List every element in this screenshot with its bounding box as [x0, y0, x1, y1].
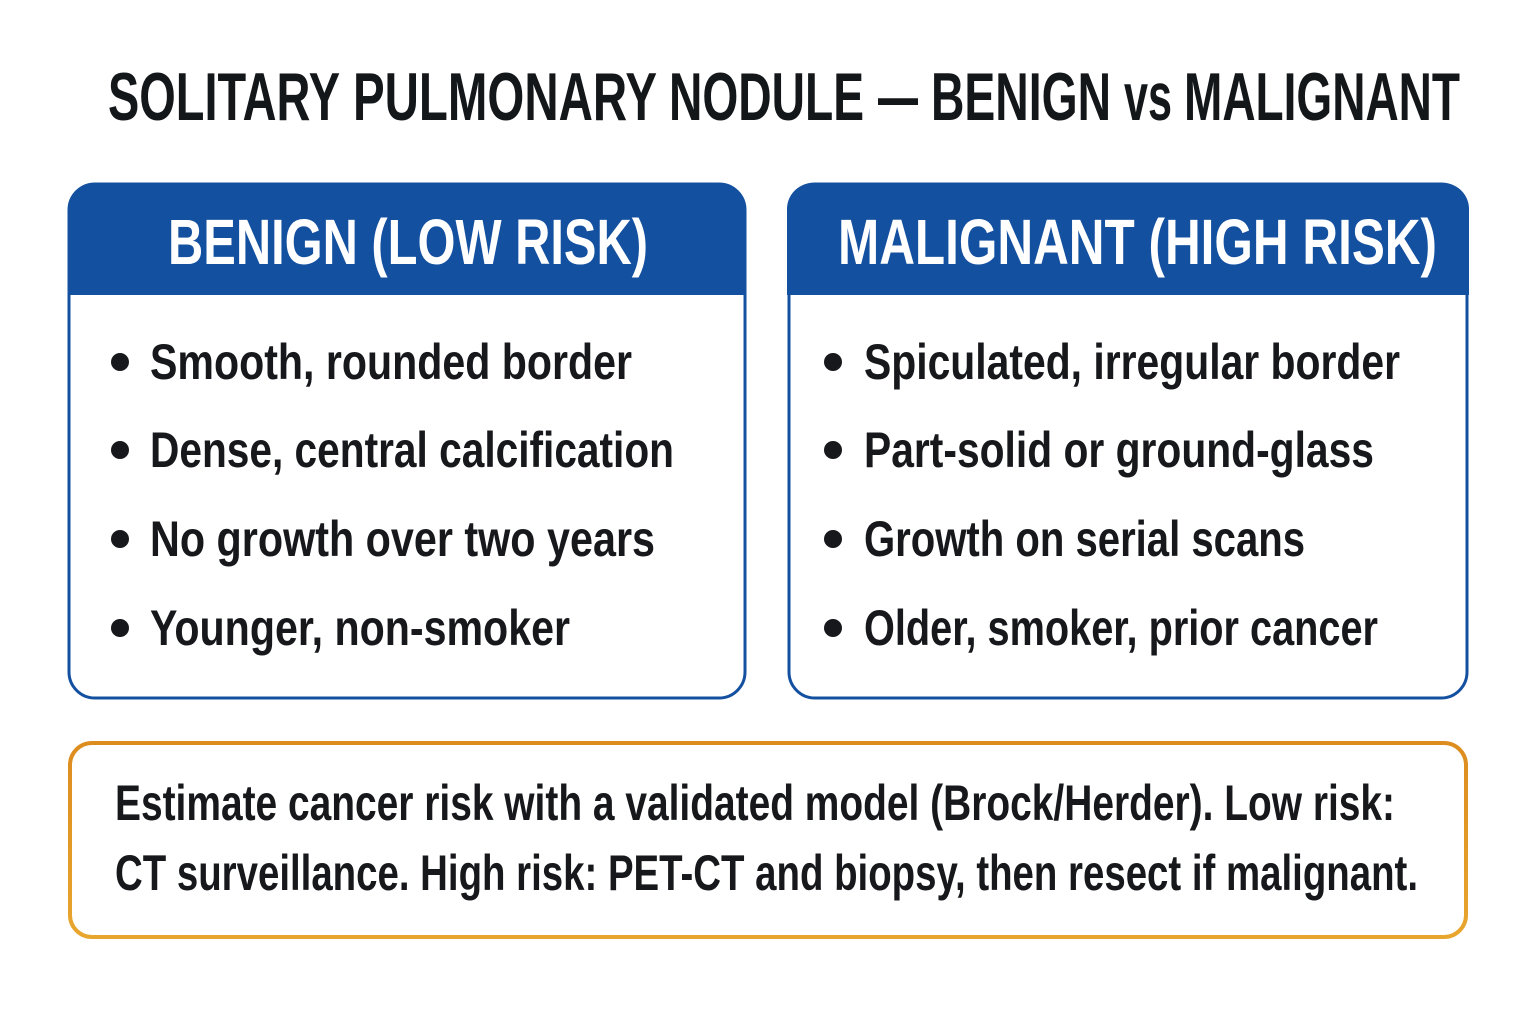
benign list: Dense, central calcification [150, 422, 674, 478]
panel: benign [68, 183, 746, 698]
malignant list: Older, smoker, prior cancer [864, 600, 1378, 656]
title: — [878, 59, 918, 135]
title: BENIGN [931, 59, 1111, 135]
title: SOLITARY [108, 59, 340, 135]
benign list: Younger, non-smoker [150, 600, 570, 656]
benign list [111, 334, 674, 656]
callout: recommendation [70, 743, 1466, 937]
malignant list: Part-solid or ground-glass [864, 422, 1374, 478]
benign list: No growth over two years [150, 511, 655, 567]
benign list: Smooth, rounded border [150, 334, 632, 390]
title: vs [1124, 59, 1172, 135]
benign heading: BENIGN (LOW RISK) [168, 206, 648, 278]
benign header bar [68, 183, 746, 295]
title: NODULE [669, 59, 864, 135]
title [108, 59, 1460, 135]
malignant header bar [787, 183, 1469, 295]
malignant list: Growth on serial scans [864, 511, 1305, 567]
title: PULMONARY [353, 59, 657, 135]
panel: malignant [787, 183, 1469, 698]
callout text [115, 775, 1418, 901]
malignant list [824, 334, 1400, 656]
malignant list: Spiculated, irregular border [864, 334, 1400, 390]
